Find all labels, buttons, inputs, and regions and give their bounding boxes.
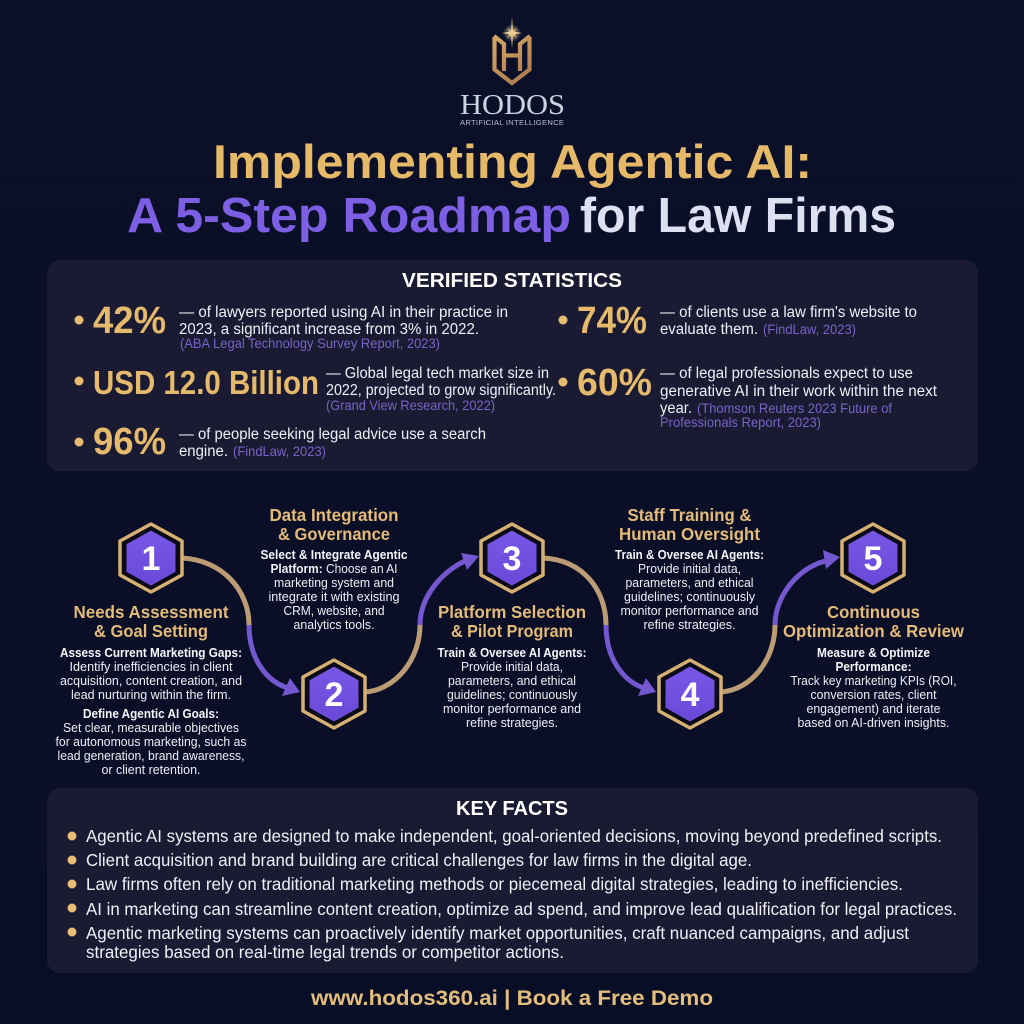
step 2 body text: Select & Integrate Agentic <box>260 548 408 562</box>
stat: 42%: — of lawyers reported using AI in their practice in <box>179 304 508 321</box>
step 3 <box>438 524 586 730</box>
step 3 heading: Platform Selection <box>438 602 586 622</box>
step 5 body text: Track key marketing KPIs (ROI, <box>790 674 956 688</box>
icon: hexagon 2: 2 <box>325 676 343 714</box>
step 1 body text: lead nurturing within the firm. <box>71 688 231 702</box>
step 4 body text: monitor performance and <box>620 604 759 618</box>
stat: 60% <box>558 362 938 430</box>
step 4 body text: Train & Oversee AI Agents: <box>615 548 764 562</box>
stat: 42%: (ABA Legal Technology Survey Report, 2023) <box>180 335 440 351</box>
step 5 heading <box>783 602 964 641</box>
step 5 body text <box>790 646 956 730</box>
step 3 body text <box>438 646 586 730</box>
arrow: step 2 to step 3 <box>365 553 479 692</box>
icon: hexagon 1 <box>120 524 182 592</box>
stat: 74%: (FindLaw, 2023) <box>763 321 856 337</box>
stat: 60%: (Thomson Reuters 2023 Future of <box>697 400 892 416</box>
step 1 body text: acquisition, content creation, and <box>60 674 242 688</box>
step 4 body text: refine strategies. <box>644 618 736 632</box>
stat: 96%: — of people seeking legal advice use a search <box>179 426 486 443</box>
icon: hexagon 3 <box>481 524 543 592</box>
stat: USD 12.0 Billion: (Grand View Research, 2022) <box>326 397 495 413</box>
icon: hexagon 4: 4 <box>681 676 700 714</box>
step 1 body text: or client retention. <box>102 763 200 777</box>
step 2 body text: analytics tools. <box>294 618 374 632</box>
step 5 body text: engagement) and iterate <box>806 702 941 716</box>
fact 1: Agentic AI systems are designed to make independent, goal-oriented decisions, moving beyond predefined scripts. <box>86 826 942 846</box>
step 5 heading: Continuous <box>827 602 920 622</box>
fact 5 <box>68 923 909 962</box>
title: A 5-Step Roadmap <box>127 189 571 243</box>
panel: key facts <box>47 788 978 973</box>
heading: key facts: KEY FACTS <box>456 798 568 820</box>
step 1 body text: Define Agentic AI Goals: <box>83 707 219 721</box>
step 2 body text: marketing system and <box>274 576 394 590</box>
step 3 heading <box>438 602 586 641</box>
panel: verified statistics <box>47 260 978 471</box>
stat: 74%: evaluate them. <box>660 321 758 338</box>
step 2 body text <box>260 548 408 632</box>
stat: USD 12.0 Billion <box>74 364 556 413</box>
stat: 60%: Professionals Report, 2023) <box>660 414 821 430</box>
stat: 60%: year. <box>660 400 692 417</box>
step 1 <box>56 524 246 777</box>
step 1 body text <box>56 646 246 777</box>
roadmap: five connected steps <box>56 505 964 777</box>
stat: 96%: (FindLaw, 2023) <box>233 443 326 459</box>
step 1 heading: Needs Assessment <box>74 602 229 622</box>
step 1 body text: Identify inefficiencies in client <box>70 660 233 674</box>
step 2 body text: Platform: Choose an AI <box>270 562 398 576</box>
stat: 96%: 96% <box>93 421 166 463</box>
step 3 body text: refine strategies. <box>466 716 558 730</box>
step 1 body text: Set clear, measurable objectives <box>63 721 239 735</box>
title: Implementing Agentic AI: <box>213 135 812 188</box>
step 5 <box>783 524 964 730</box>
fact 3: Law firms often rely on traditional marketing methods or piecemeal digital strategies, leading to inefficiencies. <box>86 874 903 894</box>
icon: hexagon 5 <box>842 524 904 592</box>
icon: hexagon 3: 3 <box>503 540 521 578</box>
fact 5: Agentic marketing systems can proactively identify market opportunities, craft nuanced campaigns, and adjust <box>86 923 909 943</box>
step 4 body text: guidelines; continuously <box>624 590 756 604</box>
icon: shield with H and star <box>494 17 530 83</box>
step 1 body text: for autonomous marketing, such as <box>56 735 246 749</box>
stat: 42% <box>74 300 508 351</box>
step 4 heading: Human Oversight <box>619 524 760 544</box>
step 4 body text: Provide initial data, <box>638 562 741 576</box>
step 3 body text: guidelines; continuously <box>447 688 578 702</box>
stat: 74%: — of clients use a law firm's website to <box>660 304 917 321</box>
stat: 60%: generative AI in their work within the next <box>660 383 938 400</box>
fact 4: AI in marketing can streamline content creation, optimize ad spend, and improve lead qualification for legal practices. <box>86 899 957 919</box>
step 3 body text: parameters, and ethical <box>448 674 576 688</box>
step 2 <box>260 505 408 728</box>
step 4 heading <box>619 505 760 544</box>
step 1 heading <box>74 602 229 641</box>
arrow: step 3 to step 4 <box>543 558 656 696</box>
arrow: step 1 to step 2 <box>182 558 300 696</box>
step 2 heading: Data Integration <box>270 505 398 525</box>
stat: USD 12.0 Billion: USD 12.0 Billion <box>93 364 319 401</box>
logo wordmark: HODOS <box>460 90 565 121</box>
step 1 body text: lead generation, brand awareness, <box>58 749 244 763</box>
stat: 74% <box>558 300 917 342</box>
heading: verified statistics: VERIFIED STATISTICS <box>402 270 622 292</box>
step 2 heading <box>270 505 398 544</box>
step 1 body text: Assess Current Marketing Gaps: <box>60 646 242 660</box>
step 4 body text: parameters, and ethical <box>626 576 754 590</box>
stat: 74%: 74% <box>577 300 647 342</box>
fact 5: strategies based on real-time legal trends or competitor actions. <box>86 942 564 962</box>
step 5 body text: Measure & Optimize <box>817 646 930 660</box>
logo tagline: ARTIFICIAL INTELLIGENCE <box>460 118 564 127</box>
stat: USD 12.0 Billion: — Global legal tech market size in <box>326 365 549 382</box>
stat: 60%: — of legal professionals expect to use <box>660 365 913 382</box>
step 3 body text: Train & Oversee AI Agents: <box>438 646 586 660</box>
step 5 body text: conversion rates, client <box>810 688 937 702</box>
step 4 <box>615 505 764 728</box>
step 2 body text: integrate it with existing <box>268 590 400 604</box>
step 1 heading: & Goal Setting <box>94 621 208 641</box>
logo: Hodos <box>460 17 565 127</box>
step 5 heading: Optimization & Review <box>783 621 964 641</box>
step 3 heading: & Pilot Program <box>451 621 573 641</box>
title <box>127 135 896 243</box>
step 3 body text: monitor performance and <box>443 702 581 716</box>
step 2 heading: & Governance <box>278 524 390 544</box>
step 4 body text <box>615 548 764 632</box>
stat: 60%: 60% <box>577 362 652 404</box>
title: for Law Firms <box>580 189 896 243</box>
icon: hexagon 2 <box>303 660 365 728</box>
icon: hexagon 1: 1 <box>142 540 160 578</box>
footer: website and call to action: www.hodos360.ai | Book a Free Demo <box>310 987 713 1010</box>
stat: 42%: 2023, a significant increase from 3% in 2022. <box>179 321 479 338</box>
fact 2: Client acquisition and brand building are critical challenges for law firms in the digital age. <box>86 850 752 870</box>
stat: USD 12.0 Billion: 2022, projected to grow significantly. <box>326 382 556 399</box>
step 2 body text: CRM, website, and <box>284 604 385 618</box>
stat: 96% <box>74 421 486 463</box>
step 5 body text: based on AI-driven insights. <box>798 716 950 730</box>
arrow: step 4 to step 5 <box>721 550 840 692</box>
step 5 body text: Performance: <box>836 660 912 674</box>
step 3 body text: Provide initial data, <box>461 660 563 674</box>
icon: hexagon 5: 5 <box>864 540 882 578</box>
icon: hexagon 4 <box>659 660 721 728</box>
stat: 42%: 42% <box>93 300 166 342</box>
step 4 heading: Staff Training & <box>628 505 752 525</box>
stat: 96%: engine. <box>179 443 228 460</box>
